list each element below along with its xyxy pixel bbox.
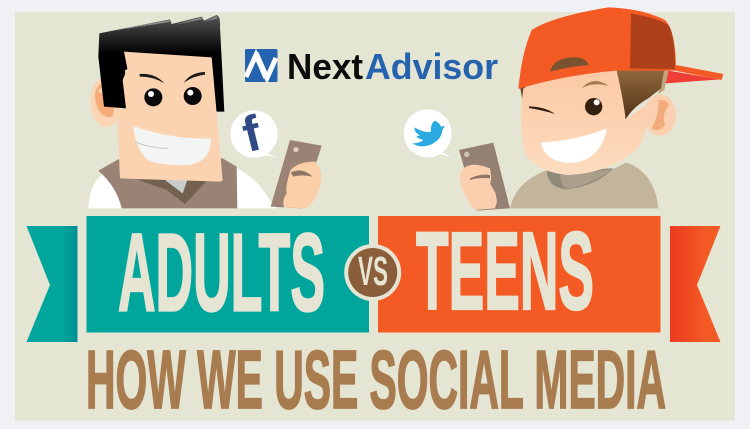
- vest: [98, 158, 237, 208]
- phone: [271, 140, 322, 208]
- cap: [518, 7, 723, 89]
- hair: [98, 15, 224, 112]
- character: adult man: [88, 15, 322, 208]
- neck shadow: [547, 168, 614, 189]
- hair highlights: [107, 16, 217, 32]
- logo wordmark: [287, 46, 498, 87]
- cap panel: [630, 13, 675, 69]
- vs badge: [344, 216, 401, 332]
- ear: [644, 94, 676, 136]
- ear: [91, 76, 121, 127]
- speech bubble with facebook icon: f: [237, 105, 267, 163]
- phone: [459, 143, 510, 211]
- eyes: [144, 87, 202, 106]
- hair: [520, 68, 669, 119]
- smile: [541, 128, 607, 163]
- logo: NextAdvisor: [245, 46, 498, 87]
- logo wordmark: Next: [287, 46, 363, 87]
- speech bubble with facebook icon: [230, 105, 278, 163]
- vs badge: VS: [358, 248, 388, 294]
- right ribbon: [670, 226, 720, 342]
- cap opening: [550, 57, 589, 72]
- face: [521, 71, 647, 175]
- shirt: [88, 163, 277, 208]
- face: [117, 52, 223, 182]
- eye: [585, 98, 602, 115]
- cap brim underside: [666, 71, 720, 83]
- banner: teens: [378, 210, 660, 333]
- eyebrows: [139, 72, 205, 83]
- hand: [460, 165, 497, 210]
- hand: [283, 162, 321, 208]
- banner: adults: ADULTS: [118, 212, 325, 334]
- logo mark: [245, 49, 278, 82]
- character: teen boy: [404, 7, 723, 211]
- banner: adults: [86, 212, 369, 334]
- body: [510, 162, 658, 208]
- eyebrow: [582, 81, 608, 88]
- speech bubble with twitter icon: [404, 109, 452, 157]
- collar: [137, 179, 207, 204]
- left ribbon: [26, 226, 78, 342]
- logo wordmark: Advisor: [365, 46, 498, 87]
- smile: [133, 126, 211, 165]
- wink: [529, 106, 555, 114]
